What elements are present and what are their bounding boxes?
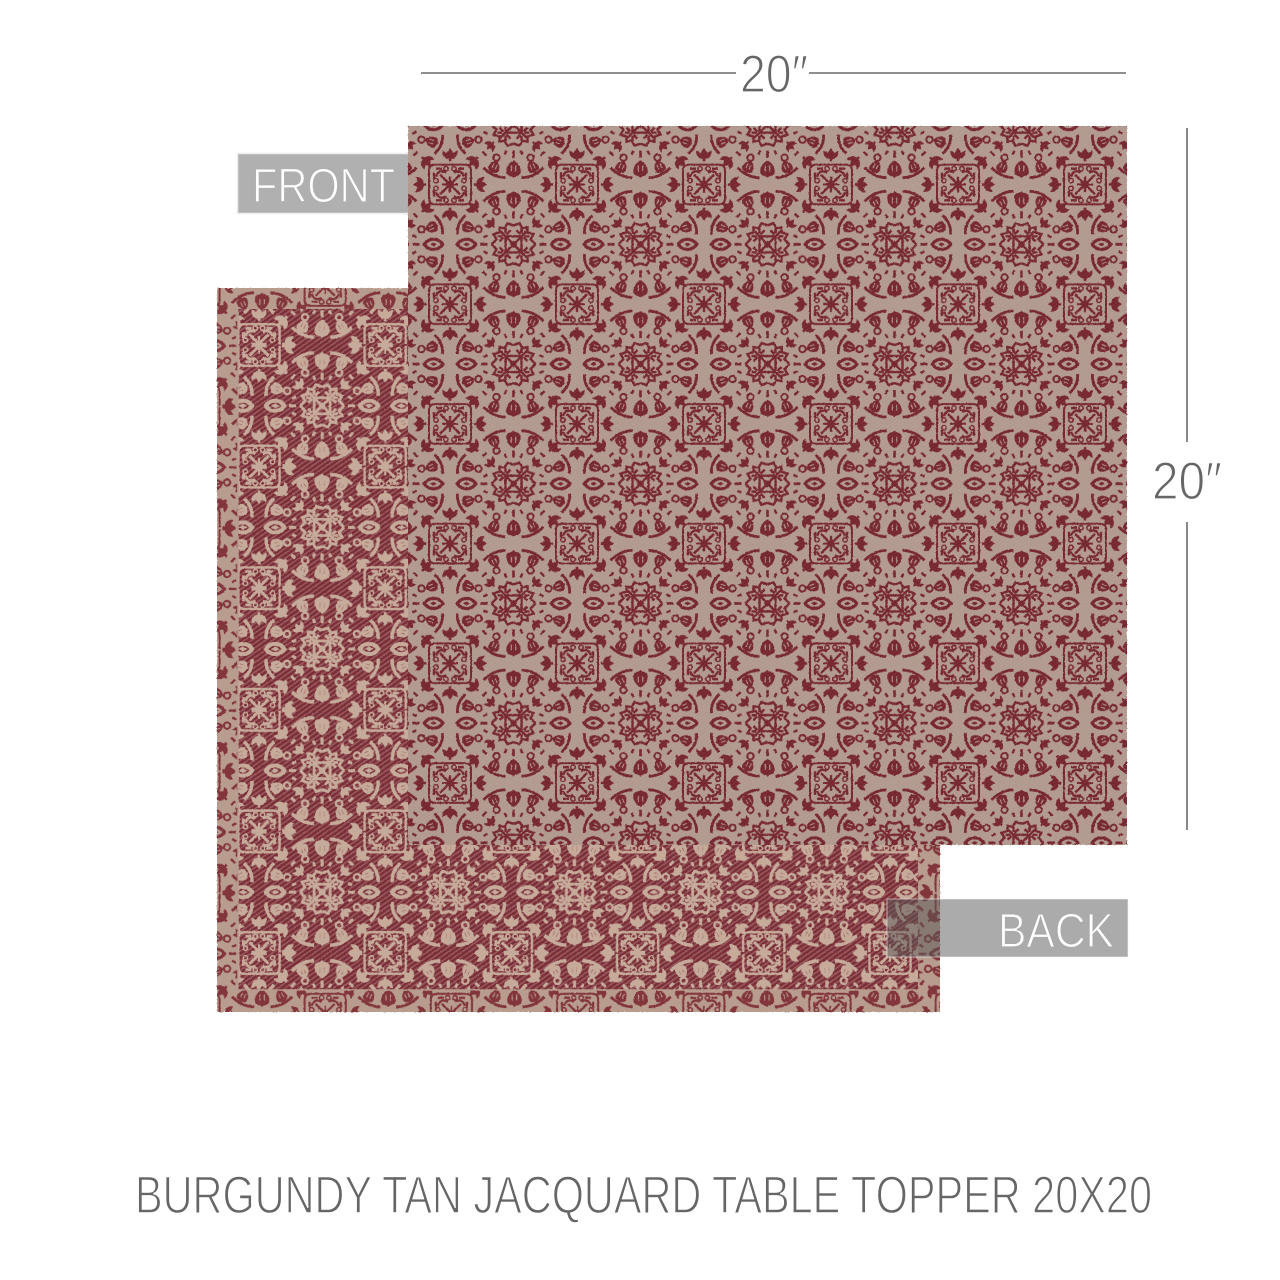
label: BACK: BACK [998, 905, 1114, 958]
front weave sheen [408, 126, 1127, 845]
back hem [217, 288, 940, 1012]
panel: back of table topper [217, 288, 940, 1012]
dimension: width 20 inches: 20″ [740, 45, 808, 104]
front fabric [408, 126, 1127, 845]
label: FRONT: FRONT [252, 160, 395, 213]
label: BACK [887, 899, 1128, 958]
dimension: height 20 inches: 20″ [1152, 452, 1222, 511]
back fabric [217, 288, 940, 1012]
panel: front of table topper [408, 126, 1127, 845]
